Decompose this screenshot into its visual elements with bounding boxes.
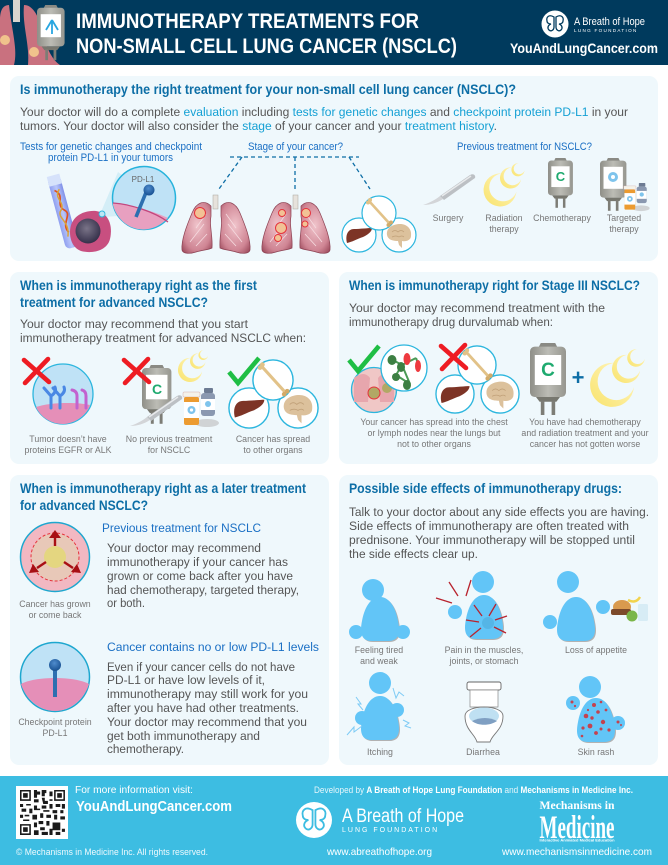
logo: Mechanisms in Medicine: Interactive Animated Medical Education (540, 838, 614, 842)
logo: Mechanisms in Medicine: Medicine (540, 810, 614, 846)
title: IMMUNOTHERAPY TREATMENTS FOR (76, 9, 419, 33)
heading: Possible side effects of immunotherapy drugs: (349, 481, 622, 496)
captions: not to other organs (397, 439, 472, 449)
heading (20, 481, 306, 513)
icon: checkpoint protein (20, 642, 90, 712)
heading: Is immunotherapy the right treatment for your non-small cell lung cancer (NSCLC)? (20, 82, 516, 97)
body text: immunotherapy drug durvalumab when: (349, 315, 553, 329)
website link: YouAndLungCancer.com (76, 799, 232, 815)
copyright: © Mechanisms in Medicine Inc. All rights reserved. (16, 847, 208, 857)
icon: itching (347, 672, 411, 741)
caption: Checkpoint protein (18, 717, 92, 727)
subheading: previous treatment: Previous treatment for NSCLC (102, 521, 261, 535)
icon: skin rash (566, 676, 625, 743)
captions: Your cancer has spread into the chest (360, 417, 508, 427)
treatment captions: therapy (489, 224, 519, 234)
icon: cell with PD-L1 magnifier (70, 166, 176, 252)
intro text: tumors. Your doctor will also consider the stage of your cancer and your treatment history. (20, 119, 497, 133)
subheading: PD-L1 levels: Cancer contains no or low PD-L1 levels (107, 640, 319, 654)
icon: no previous treatment: C (152, 381, 162, 397)
text: PD-L1 levels (107, 660, 308, 756)
logo: A Breath of Hope: LUNG FOUNDATION (342, 827, 439, 834)
title: NON-SMALL CELL LUNG CANCER (NSCLC) (76, 34, 457, 58)
icon: organs (342, 196, 416, 252)
icon: scalpel (423, 174, 475, 205)
captions: proteins EGFR or ALK (24, 445, 112, 455)
captions (360, 417, 649, 449)
captions: Tumor doesn’t have (29, 434, 107, 444)
subheading: tests: Tests for genetic changes and checkpoint (20, 141, 202, 153)
website: abreathofhope: www.abreathofhope.org (326, 847, 432, 858)
captions: and weak (360, 656, 398, 666)
body text: Side effects of immunotherapy are often treated with (349, 519, 629, 533)
caption: or come back (29, 610, 82, 620)
icon: no previous treatment (124, 350, 219, 427)
captions (355, 645, 627, 757)
treatment captions: Chemotherapy (533, 213, 591, 223)
subheading: previous treatment: Previous treatment for NSCLC? (457, 141, 592, 153)
intro text: Your doctor will do a complete evaluation including tests for genetic changes and checkpoint protein PD-L1 in your (20, 105, 628, 119)
heading (20, 278, 257, 310)
icon: lungs with one tumor (182, 195, 250, 253)
icon: radiation (484, 163, 525, 206)
text: PD-L1 levels: after you have had other treatments. (107, 701, 299, 715)
icon: chemo plus radiation: C (541, 360, 555, 381)
footer (0, 776, 668, 865)
icon: targeted therapy (600, 158, 650, 211)
subheading: tests (20, 141, 202, 164)
visit text: For more information visit: (75, 785, 193, 796)
text: PD-L1 levels: get both immunotherapy and (107, 729, 260, 743)
captions: Feeling tired (355, 645, 403, 655)
captions: cancer has not gotten worse (530, 439, 640, 449)
icon: tumor without proteins (24, 359, 93, 424)
icon: lungs with several tumors (262, 195, 330, 253)
logo: A Breath of Hope (296, 802, 464, 838)
captions: joints, or stomach (449, 656, 519, 666)
panel: first treatment (10, 272, 329, 464)
captions: and radiation treatment and your (521, 428, 649, 438)
captions: Pain in the muscles, (445, 645, 523, 655)
QR code (16, 786, 68, 839)
logo: Mechanisms in Medicine (540, 800, 615, 846)
caption (18, 717, 92, 738)
text: previous treatment: grown or come back after you have (107, 569, 293, 583)
captions: Diarrhea (466, 747, 500, 757)
title (76, 9, 457, 58)
logo: A Breath of Hope (542, 10, 645, 38)
caption: PD-L1 (43, 728, 68, 738)
treatment captions: Radiation (485, 213, 523, 223)
text: PD-L1 levels: PD-L1 or have low levels of it, (107, 673, 265, 687)
heading: When is immunotherapy right as a later treatment (20, 481, 306, 496)
treatment captions: therapy (609, 224, 639, 234)
icon: spread to other organs (229, 358, 318, 428)
captions: or lymph nodes near the lungs but (367, 428, 501, 438)
body text: prednisone. Your immunotherapy will be stopped until (349, 533, 635, 547)
icon: chemotherapy bag (548, 158, 573, 208)
text: previous treatment (107, 541, 299, 610)
text: previous treatment: or both. (107, 596, 145, 610)
intro text (20, 105, 628, 133)
icon: growing tumor (20, 522, 90, 592)
treatment captions: Surgery (433, 213, 464, 223)
caption: Cancer has grown (19, 599, 91, 609)
body text: the side effects clear up. (349, 547, 478, 561)
text: PD-L1 levels: Even if your cancer cells do not have (107, 660, 295, 674)
text: PD-L1 levels: immunotherapy may still work for you (107, 687, 308, 701)
panel: is immunotherapy right (10, 76, 658, 261)
body text (20, 317, 306, 345)
captions: for NSCLC (148, 445, 191, 455)
body text (349, 505, 649, 561)
captions: You have had chemotherapy (529, 417, 641, 427)
heading: When is immunotherapy right as the first (20, 278, 257, 293)
icon: loss of appetite (543, 571, 648, 642)
panel: stage III (339, 272, 658, 464)
body text: Your doctor may recommend treatment with the (349, 301, 605, 315)
heading: for advanced NSCLC? (20, 498, 148, 513)
captions: Loss of appetite (565, 645, 627, 655)
icon: chemo plus radiation: + (572, 365, 584, 390)
text: previous treatment: had chemotherapy, targeted therapy, (107, 583, 299, 597)
body text: immunotherapy treatment for advanced NSCLC when: (20, 331, 306, 345)
captions: Itching (367, 747, 393, 757)
logo: A Breath of Hope: LUNG FOUNDATION (574, 28, 638, 33)
icon: tired person (349, 579, 410, 642)
text: previous treatment: Your doctor may recommend (107, 541, 261, 555)
caption (19, 599, 91, 620)
subheading: tests: protein PD-L1 in your tumors (48, 152, 173, 164)
heading: When is immunotherapy right for Stage III NSCLC? (349, 278, 640, 293)
captions: to other organs (243, 445, 303, 455)
website: mechanisms: www.mechanismsinmedicine.com (501, 847, 652, 858)
treatment captions (433, 213, 641, 234)
text: PD-L1 levels: chemotherapy. (107, 742, 184, 756)
icon: toilet (465, 682, 503, 742)
header band (0, 0, 668, 65)
text: PD-L1 levels: Your doctor may recommend that you (107, 715, 307, 729)
logo: Mechanisms in Medicine: Mechanisms in (540, 800, 615, 812)
logo: A Breath of Hope: A Breath of Hope (574, 16, 645, 28)
body text: Your doctor may recommend that you start (20, 317, 249, 331)
panel: side effects (339, 475, 658, 765)
developed by: Developed by A Breath of Hope Lung Foundation and Mechanisms in Medicine Inc. (314, 785, 633, 795)
icon: lungs and IV bag (0, 0, 65, 65)
icon: chest and lymph nodes (349, 345, 427, 412)
icon: chemo plus radiation (530, 343, 645, 415)
icon: chemotherapy bag: C (556, 169, 566, 184)
captions (24, 434, 310, 455)
icon: test tube with DNA (47, 174, 79, 249)
captions: No previous treatment (126, 434, 213, 444)
captions: Skin rash (578, 747, 614, 757)
icon: cell with PD-L1 magnifier: PD-L1 (132, 175, 155, 184)
subheading: stage: Stage of your cancer? (248, 141, 343, 153)
panel: later treatment (10, 475, 329, 765)
dashed connector lines (219, 157, 370, 190)
body text (349, 301, 605, 329)
icon: person in pain (436, 571, 507, 640)
body text: Talk to your doctor about any side effects you are having. (349, 505, 649, 519)
icon: not spread to organs (436, 345, 519, 413)
treatment captions: Targeted (607, 213, 641, 223)
logo: A Breath of Hope: A Breath of Hope (342, 806, 464, 827)
heading: treatment for advanced NSCLC? (20, 295, 208, 310)
captions: Cancer has spread (236, 434, 310, 444)
text: previous treatment: immunotherapy if your cancer has (107, 555, 288, 569)
